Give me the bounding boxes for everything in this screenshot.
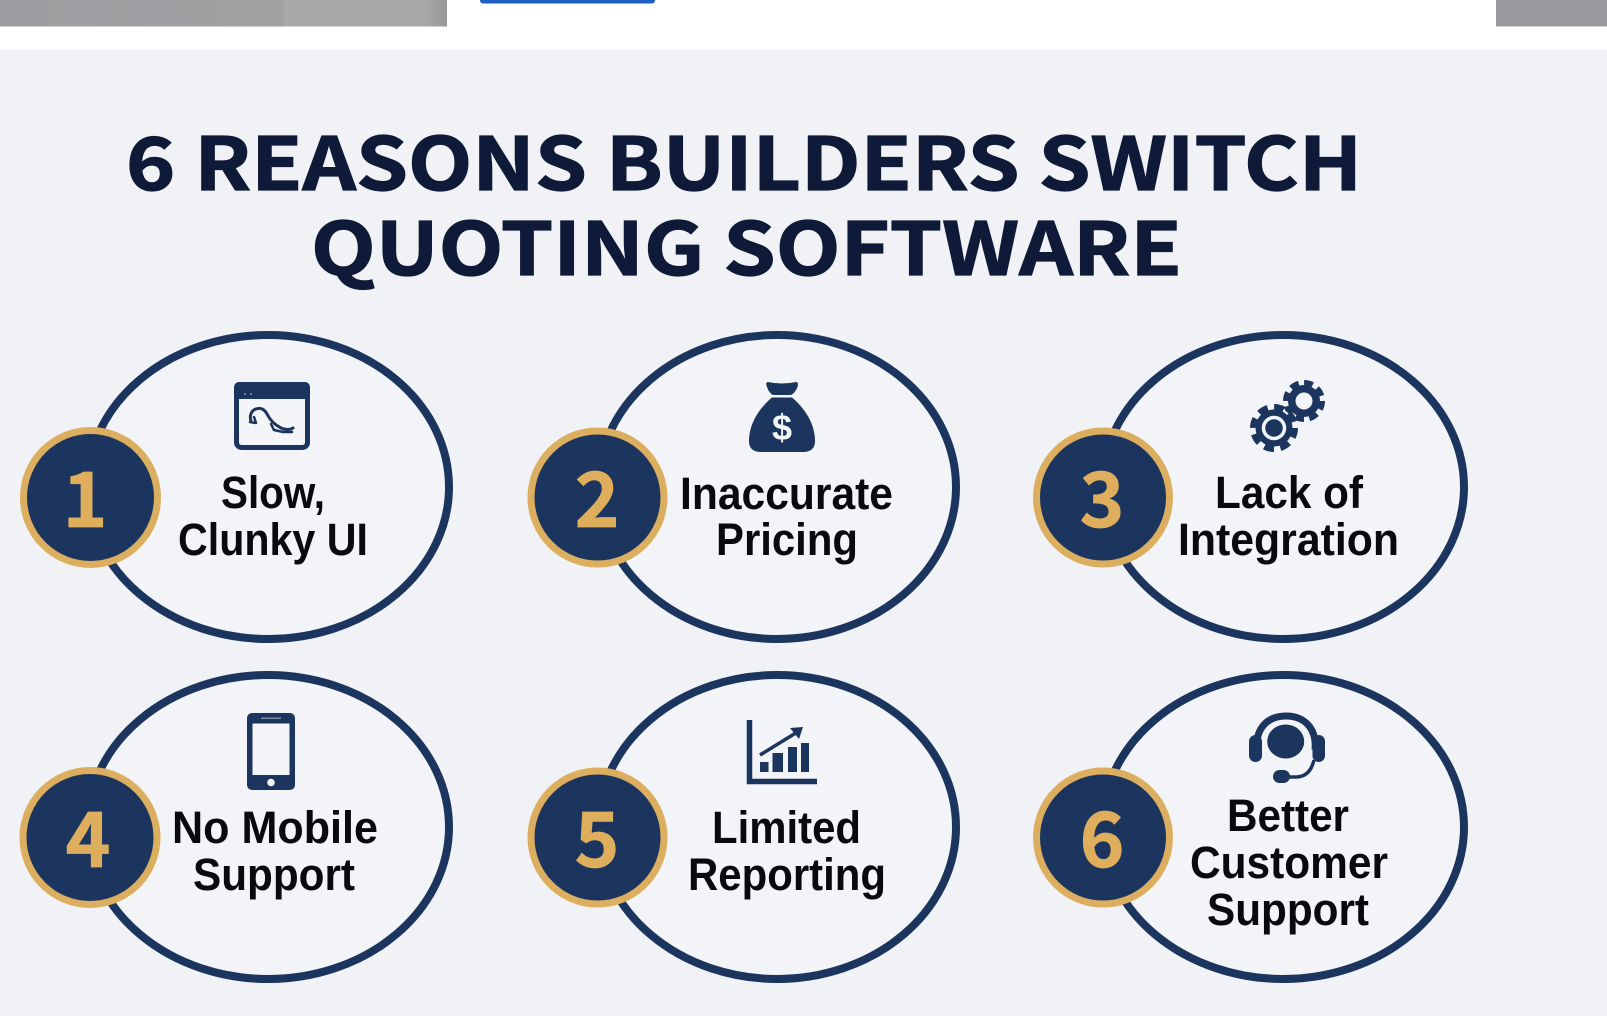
oval outline 4 <box>87 675 449 979</box>
label: Slow, Clunky UI: Slow, <box>221 467 325 518</box>
number badge 5: 5 <box>575 779 619 889</box>
oval outline 1 <box>87 335 449 639</box>
label: Slow, Clunky UI <box>178 467 368 565</box>
oval outline 2 <box>598 335 956 639</box>
label: Better Customer Support <box>1190 790 1388 935</box>
label: Lack of Integration <box>1178 467 1399 565</box>
panel: reason 1 slow clunky UI <box>24 335 449 639</box>
icon: rising bar chart <box>750 720 817 782</box>
label: Limited Reporting: Limited <box>712 802 861 853</box>
icon: money bag: $ <box>772 407 792 448</box>
panel: reason 4 no mobile support <box>23 675 449 979</box>
title: QUOTING SOFTWARE <box>311 191 1182 297</box>
label: Inaccurate Pricing: Inaccurate <box>680 468 893 519</box>
label: Better Customer Support: Support <box>1207 884 1369 935</box>
number badge 2 <box>531 431 664 564</box>
icon: browser window with squiggle <box>234 382 310 448</box>
label: Inaccurate Pricing: Pricing <box>716 514 858 565</box>
label: No Mobile Support: No Mobile <box>172 802 378 853</box>
number badge 4 <box>23 770 157 904</box>
number badge 6: 6 <box>1080 779 1124 889</box>
label: Lack of Integration: Lack of <box>1215 467 1364 518</box>
number badge 3: 3 <box>1080 439 1124 549</box>
label: Better Customer Support: Better <box>1227 790 1349 841</box>
panel: reason 3 lack of integration <box>1036 335 1464 639</box>
number badge 2: 2 <box>575 439 619 549</box>
top strip: cropped left image <box>0 0 447 26</box>
label: Lack of Integration: Integration <box>1178 514 1399 565</box>
panel: reason 6 better customer support <box>1036 675 1464 979</box>
icon: headset agent <box>1249 716 1325 783</box>
title <box>126 106 1362 297</box>
label: No Mobile Support: Support <box>193 849 355 900</box>
number badge 4: 4 <box>66 779 110 889</box>
panel: reason 2 inaccurate pricing <box>531 335 956 639</box>
label: Better Customer Support: Customer <box>1190 837 1388 888</box>
top strip: cropped blue button <box>480 0 655 4</box>
panel: reason 5 limited reporting <box>531 675 956 979</box>
number badge 1: 1 <box>63 439 107 549</box>
label: Inaccurate Pricing <box>680 468 893 565</box>
label: Slow, Clunky UI: Clunky UI <box>178 514 368 565</box>
oval outline 5 <box>598 675 956 979</box>
label: Limited Reporting <box>688 802 886 900</box>
number badge 6 <box>1036 771 1170 904</box>
label: No Mobile Support <box>172 802 378 900</box>
number badge 1 <box>24 430 158 564</box>
number badge 5 <box>531 771 664 904</box>
label: Limited Reporting: Reporting <box>688 849 886 900</box>
top strip: cropped right image <box>1496 0 1607 26</box>
icon: money bag <box>749 382 815 452</box>
icon: smartphone <box>247 713 295 790</box>
oval outline 3 <box>1102 335 1464 639</box>
title: 6 REASONS BUILDERS SWITCH <box>126 106 1362 212</box>
number badge 3 <box>1036 431 1170 564</box>
icon: gears <box>1254 384 1322 448</box>
oval outline 6 <box>1102 675 1464 979</box>
